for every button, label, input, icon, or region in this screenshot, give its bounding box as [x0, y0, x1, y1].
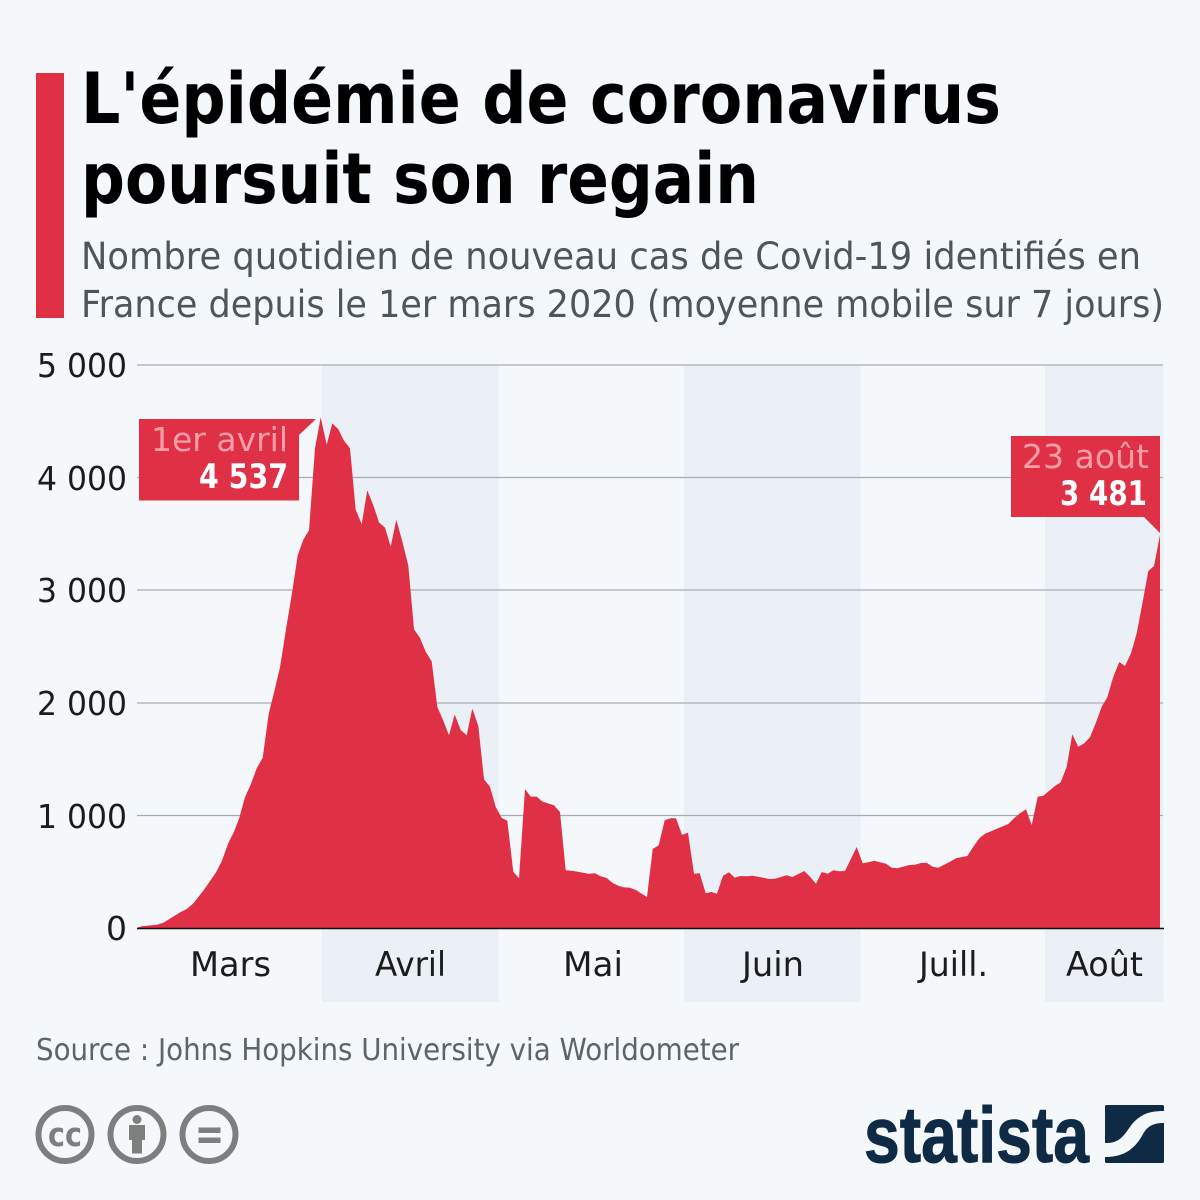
- y axis labels: [37, 346, 127, 948]
- y axis labels: 1 000: [37, 797, 127, 836]
- callout: 23 août latest value: [1011, 436, 1160, 533]
- month background bands: [322, 365, 1164, 1002]
- y axis labels: 3 000: [37, 571, 127, 610]
- y axis labels: 5 000: [37, 346, 127, 385]
- callout: 1er avril peak: [139, 419, 316, 500]
- callout: 1er avril peak: 1er avril: [151, 420, 288, 459]
- x axis month labels: Mai: [563, 945, 623, 985]
- title: L'épidémie de coronavirus: [81, 58, 1001, 140]
- horizontal grid lines: [137, 365, 1163, 816]
- x axis month labels: [190, 945, 1143, 985]
- statista wordmark: statista: [864, 1090, 1090, 1179]
- statista logo mark: [1105, 1105, 1164, 1163]
- title accent bar: [36, 73, 64, 318]
- source note: Source : Johns Hopkins University via Worldometer: [36, 1033, 740, 1068]
- icon: creative commons CC: cc: [48, 1115, 82, 1154]
- x axis baseline: [137, 928, 1164, 930]
- y axis labels: 0: [106, 909, 127, 948]
- chart: daily new cases area chart: [37, 346, 1164, 1002]
- area series: [137, 417, 1160, 928]
- subtitle: Nombre quotidien de nouveau cas de Covid-19 identifiés en: [81, 234, 1141, 278]
- icon: creative commons CC: [38, 1108, 92, 1161]
- title: poursuit son regain: [81, 138, 759, 220]
- x axis month labels: Août: [1066, 945, 1143, 985]
- subtitle: [81, 234, 1164, 326]
- callout: 23 août latest value: 3 481: [1060, 474, 1147, 514]
- icon: no derivatives equals: [182, 1108, 236, 1161]
- x axis month labels: Juin: [740, 945, 804, 985]
- x axis month labels: Mars: [190, 945, 271, 985]
- x axis month labels: Juill.: [917, 945, 988, 985]
- icon: attribution person: [110, 1108, 164, 1161]
- title: [81, 58, 1001, 220]
- y axis labels: 4 000: [37, 459, 127, 498]
- y axis labels: 2 000: [37, 684, 127, 723]
- x axis month labels: Avril: [375, 945, 446, 985]
- callout: 1er avril peak: 4 537: [199, 457, 288, 497]
- callout: 23 août latest value: 23 août: [1022, 437, 1149, 476]
